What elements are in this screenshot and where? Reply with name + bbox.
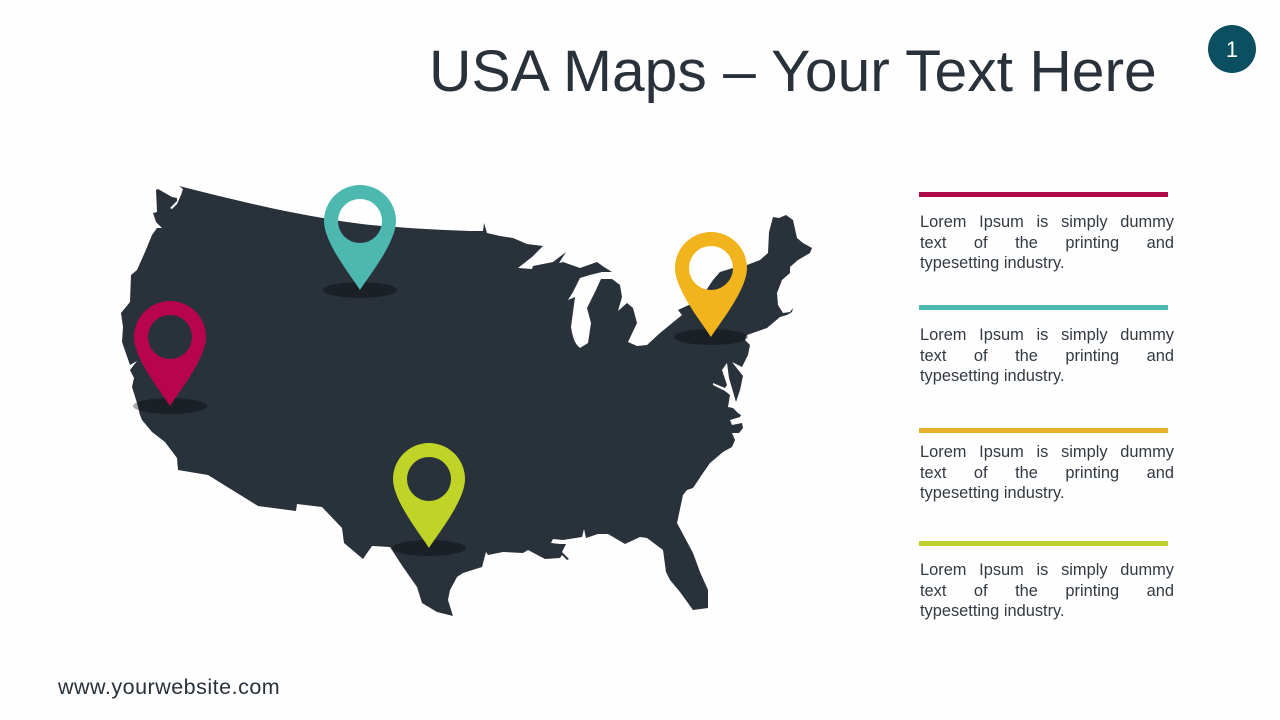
legend bar: teal	[919, 305, 1168, 310]
USA map silhouette	[121, 186, 812, 616]
legend text 4: typesetting industry.	[920, 602, 1065, 620]
page number badge	[1208, 25, 1256, 73]
legend bar: crimson	[919, 192, 1168, 197]
legend text 4: text of the printing and	[920, 582, 1174, 600]
legend text 1: text of the printing and	[920, 234, 1174, 252]
title: USA Maps – Your Text Here	[429, 39, 1157, 104]
pin: amber	[674, 232, 748, 345]
legend text 4: Lorem Ipsum is simply dummy	[920, 561, 1174, 579]
pin: lime	[392, 443, 466, 556]
legend text 1: Lorem Ipsum is simply dummy	[920, 213, 1174, 231]
legend text 2: Lorem Ipsum is simply dummy	[920, 326, 1174, 344]
legend text 1: typesetting industry.	[920, 254, 1065, 272]
pin: crimson	[133, 301, 207, 414]
legend bar: lime	[919, 541, 1168, 546]
website footer: www.yourwebsite.com	[58, 675, 280, 699]
legend text 3: Lorem Ipsum is simply dummy	[920, 443, 1174, 461]
legend bar: amber	[919, 428, 1168, 433]
pin: teal	[323, 185, 397, 298]
legend text 2	[920, 326, 1174, 385]
page number badge: 1	[1226, 37, 1238, 62]
legend text 3: typesetting industry.	[920, 484, 1065, 502]
legend text 2: typesetting industry.	[920, 367, 1065, 385]
legend text 1	[920, 213, 1174, 272]
legend text 4	[920, 561, 1174, 620]
legend text 3	[920, 443, 1174, 502]
legend text 3: text of the printing and	[920, 464, 1174, 482]
legend text 2: text of the printing and	[920, 346, 1174, 364]
